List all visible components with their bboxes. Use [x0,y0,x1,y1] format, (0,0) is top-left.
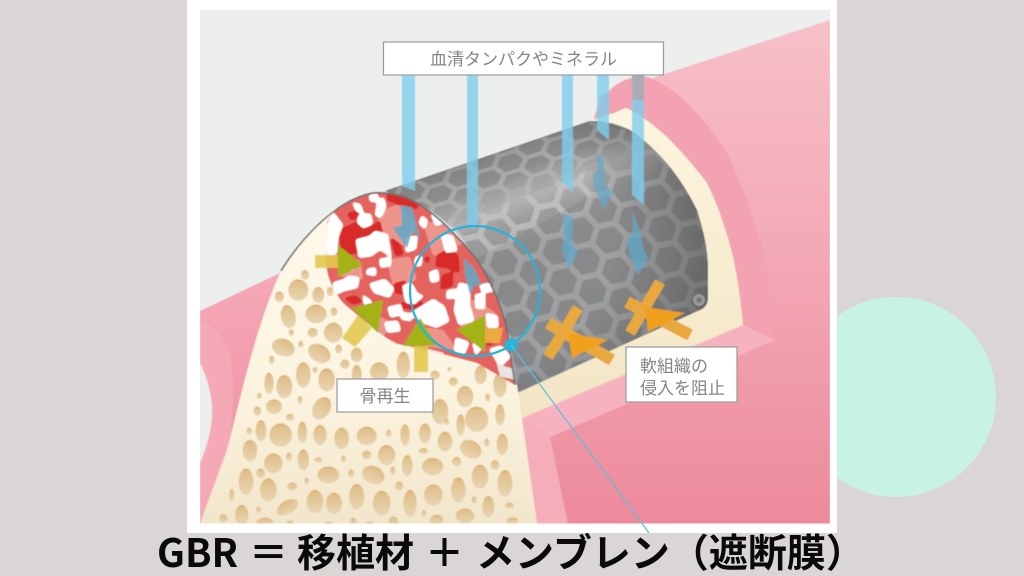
label: serum proteins and minerals: 血清タンパクやミネラル [430,50,617,69]
pale grey granules [387,338,514,380]
arrows: bone regeneration [315,245,503,372]
membrane: honeycomb mesh tube [384,120,708,393]
blocked arrow near [548,308,612,360]
label: bone regeneration [337,379,433,412]
graft: bone graft material [326,192,515,385]
label: blocks soft tissue invasion: 軟組織の [640,357,708,376]
background circle: mint [796,297,996,497]
blocked arrow far [627,282,690,335]
label: bone regeneration: 骨再生 [360,387,410,406]
gum: arch cut edge [522,76,775,524]
bone: upper ridge surface [517,108,743,418]
arrow: regeneration bottom [403,318,437,372]
illustration: cross-section of jaw ridge [200,10,830,527]
arrow: regeneration left [315,245,363,277]
arrow: regeneration right [457,315,503,352]
bone pores [219,270,519,527]
arrow: regeneration lower-left [342,300,383,347]
white granules [325,193,511,368]
graft outline [281,193,515,385]
bone: trabecular cross-section [200,207,537,527]
white panel [187,0,837,533]
icon: membrane screw [694,295,704,305]
callout: magnifier circle with leader [410,226,649,533]
panel: grey sky background [200,10,830,312]
label: blocks soft tissue invasion: 侵入を阻止 [640,379,725,398]
salmon patches [340,203,497,350]
gum: rear tissue block [520,20,830,524]
gum: left tissue [200,273,300,524]
arrows: blue fluid under membrane [393,153,648,295]
label: serum proteins and minerals [384,42,664,75]
dark red patches [338,193,493,346]
arrows: blue serum columns [402,75,644,229]
label: blocks soft tissue invasion [626,347,737,402]
arrows: blocked soft tissue [548,282,690,360]
